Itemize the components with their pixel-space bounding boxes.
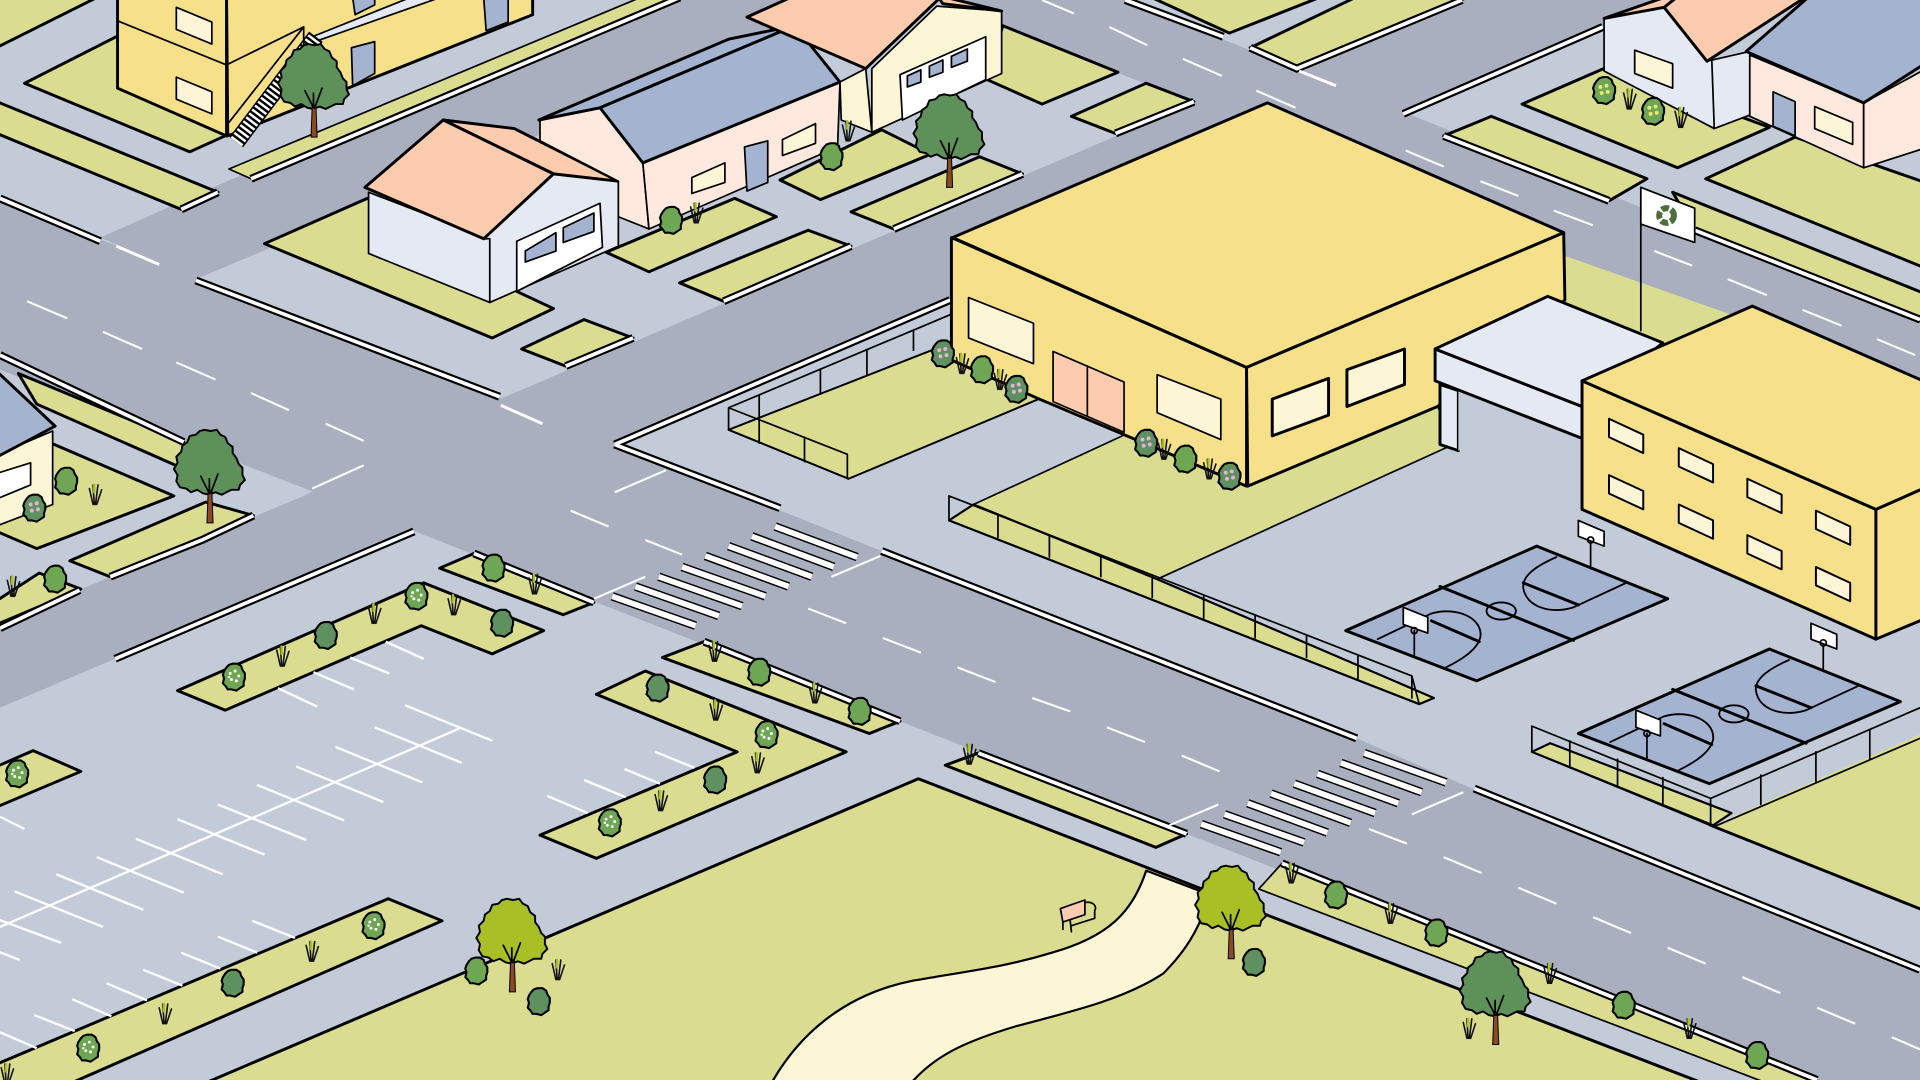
grass south east of courts: [1711, 735, 1920, 909]
basketball court one: [1346, 520, 1668, 681]
yellow flowering bushes: [1593, 77, 1664, 125]
strip below courts: [1532, 743, 1731, 825]
double door: [1053, 351, 1124, 432]
left median: [70, 502, 253, 577]
left wall: [951, 238, 1247, 486]
left lower lot: [0, 573, 81, 626]
canopy walkway: [1435, 296, 1663, 451]
pink flowering bushes: [23, 340, 1240, 522]
tree by stairs: [278, 44, 349, 137]
bench: [1060, 900, 1095, 932]
house C cream with peach roof: [747, 0, 1002, 132]
yellow building lawn: [24, 37, 228, 152]
house A lawn: [264, 198, 553, 338]
house left edge: [0, 370, 55, 527]
house C side lawn: [987, 26, 1118, 104]
stairs: [236, 37, 316, 142]
basketball court two: [1578, 623, 1900, 784]
median by side street: [229, 0, 686, 179]
right wall: [1247, 233, 1565, 486]
windows: [1609, 419, 1850, 601]
crosswalk west: [612, 527, 857, 626]
parking lot markings: [0, 642, 694, 1048]
roof: [953, 103, 1564, 367]
tree by house C: [913, 94, 984, 187]
tree at park east: [1460, 951, 1531, 1044]
lawn edge east of courts: [1711, 825, 1920, 910]
small planter A: [522, 320, 633, 366]
median beside park: [945, 753, 1187, 847]
small planter B: [680, 230, 851, 301]
white flowering bushes: [6, 583, 778, 1062]
small planter left edge: [0, 751, 81, 808]
fence around courts: [1532, 708, 1920, 827]
median top right: [1444, 116, 1647, 201]
blue doors: [351, 0, 508, 86]
house top right white: [1604, 0, 1805, 129]
small planter C: [851, 157, 1022, 229]
fenced lawn: [729, 339, 1038, 479]
small planter D: [1071, 83, 1194, 133]
crosswalk median west: [440, 553, 594, 615]
fence around lawn: [729, 315, 950, 479]
winding park path: [767, 871, 1201, 1080]
median by crossing: [662, 642, 900, 733]
left house lawn strip: [18, 373, 184, 468]
verge top right: [1673, 192, 1920, 324]
L-shaped planter bottom: [540, 671, 846, 858]
second yellow building: [1582, 306, 1920, 639]
house C front lawn: [780, 130, 931, 200]
house top right pink: [1746, 0, 1920, 168]
upper east road: [940, 0, 1920, 402]
side street north west: [100, 0, 861, 279]
house A white with peach roof: [365, 120, 618, 302]
house B pink with blue roof: [539, 26, 840, 229]
long median east of crossing: [1259, 863, 1834, 1080]
far northeast road: [1297, 0, 1665, 114]
crosswalk east: [1201, 753, 1446, 852]
trees: [174, 44, 1531, 1044]
house B lawn: [606, 198, 776, 272]
fence along big lawn: [949, 496, 1419, 704]
lower long planter: [0, 899, 442, 1080]
houses lawn top right: [1522, 67, 1769, 168]
grass strip along fence: [949, 504, 1434, 704]
dark green bushes: [222, 610, 1265, 1015]
left house lawn: [0, 443, 174, 549]
mid green bushes: [44, 143, 1768, 1069]
tree at park west: [476, 899, 547, 992]
flagpole and flag: [1641, 187, 1695, 331]
tree at path: [1195, 866, 1266, 959]
park lawn: [184, 779, 1727, 1080]
two storey yellow building top left: [118, 0, 533, 142]
L-shaped planter top: [178, 583, 544, 710]
median top centre: [1250, 0, 1476, 69]
right wall windows: [1272, 349, 1404, 436]
median top left: [0, 100, 218, 209]
southwest road: [0, 398, 612, 708]
tree left block: [174, 430, 245, 523]
large lawn top right: [1706, 137, 1920, 269]
median top north: [1144, 0, 1329, 33]
lawn by big building rear: [1565, 256, 1731, 355]
big building front lawn: [973, 407, 1456, 579]
left wall windows: [969, 298, 1221, 440]
large yellow building: [951, 103, 1565, 486]
northeast road: [500, 73, 1347, 444]
lawn top left corner: [0, 0, 104, 49]
balcony walkway: [312, 0, 447, 40]
